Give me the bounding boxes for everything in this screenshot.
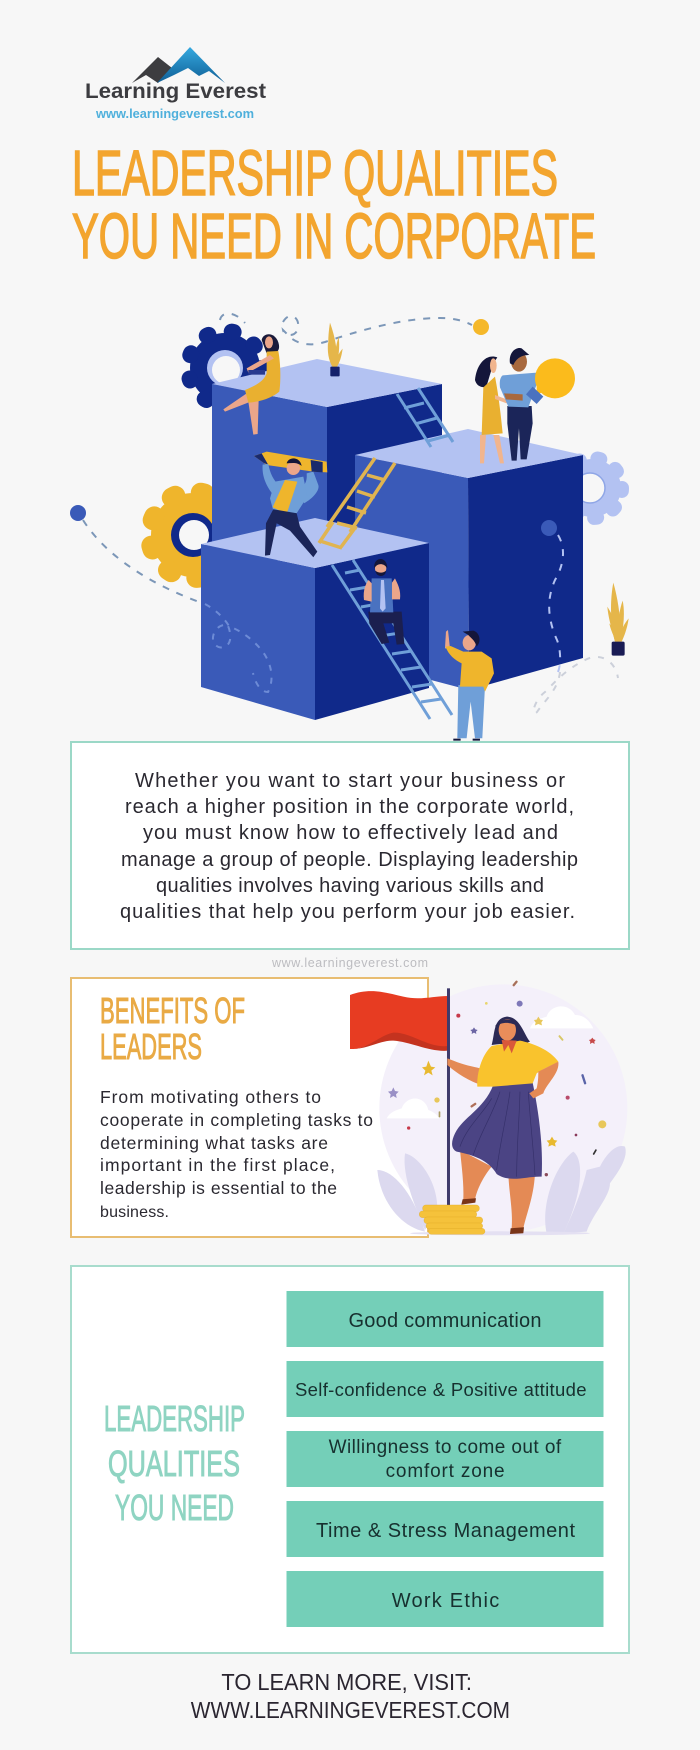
benefits paragraph	[100, 1087, 373, 1221]
woman	[447, 1017, 558, 1234]
leaves	[377, 1146, 626, 1233]
hero illustration: blocks, gears and people	[70, 314, 629, 741]
ladder: front	[332, 560, 452, 719]
icon: yellow dot	[473, 319, 489, 335]
quality: self-confidence	[286, 1361, 604, 1417]
intro paragraph: reach a higher position in the corporate world,	[125, 796, 574, 818]
panel: intro text	[71, 742, 629, 949]
ladder: light blue on block A	[397, 388, 453, 447]
panel: leadership qualities you need	[71, 1266, 629, 1653]
qualities heading: QUALITIES	[108, 1443, 240, 1484]
quality: self-confidence: Self-confidence & Positive attitude	[295, 1379, 586, 1400]
intro paragraph	[120, 770, 578, 923]
icon: plant right	[607, 583, 629, 656]
footer call to action	[191, 1669, 510, 1723]
block C	[201, 518, 429, 720]
flag pole	[447, 988, 450, 1207]
intro paragraph: manage a group of people. Displaying leadership	[121, 849, 578, 871]
quality: work ethic	[286, 1571, 604, 1627]
quality: good communication: Good communication	[348, 1310, 542, 1332]
icon: dark blue gear	[188, 331, 262, 405]
benefits paragraph: From motivating others to	[100, 1087, 321, 1107]
intro paragraph: you must know how to effectively lead and	[143, 822, 558, 844]
block A	[212, 359, 442, 560]
pale background circle	[379, 984, 627, 1232]
person: man holding light bulb	[500, 348, 575, 461]
benefits paragraph: important in the first place,	[100, 1155, 335, 1175]
benefits heading: BENEFITS OF	[100, 990, 245, 1031]
icon: light gear	[562, 458, 622, 518]
intro paragraph: Whether you want to start your business or	[135, 770, 565, 792]
block B	[355, 429, 583, 690]
intro paragraph: qualities that help you perform your job easier.	[120, 901, 575, 923]
confetti and stars	[388, 980, 606, 1176]
footer call to action: TO LEARN MORE, VISIT:	[221, 1669, 472, 1695]
qualities heading: LEADERSHIP	[104, 1398, 245, 1439]
quality: time and stress	[286, 1501, 604, 1557]
red flag	[350, 991, 448, 1051]
intro paragraph: qualities involves having various skills and	[156, 875, 544, 897]
icon: yellow gear	[150, 492, 236, 578]
benefits heading	[100, 990, 245, 1067]
panel: benefits of leaders	[71, 978, 627, 1237]
person: man in yellow shirt looking up	[445, 630, 494, 741]
dashed paths on blocks	[205, 604, 272, 692]
dashed path: right lower	[534, 657, 618, 713]
icon: blue dot right	[541, 520, 557, 536]
benefits heading: LEADERS	[100, 1026, 202, 1067]
quality: work ethic: Work Ethic	[392, 1590, 499, 1612]
icon: blue dot left	[70, 505, 86, 521]
qualities heading: YOU NEED	[115, 1487, 234, 1528]
ground shadow	[410, 1231, 590, 1235]
quality: willingness: comfort zone	[386, 1461, 505, 1482]
ladder: yellow	[319, 458, 395, 548]
person: bearded man on ladder	[364, 559, 404, 645]
title	[72, 137, 596, 272]
logo: Learning Everest	[85, 47, 266, 121]
person: woman with yellow dress	[475, 356, 508, 463]
icon: plant on block	[328, 323, 343, 376]
icon: mountains	[132, 47, 225, 83]
logo url: www.learningeverest.com	[95, 106, 254, 121]
benefits paragraph: cooperate in completing tasks to	[100, 1110, 373, 1130]
watermark url: www.learningeverest.com	[271, 956, 428, 970]
illustration: woman with flag	[350, 980, 627, 1235]
coin stack	[419, 1205, 485, 1234]
benefits paragraph: determining what tasks are	[100, 1133, 328, 1153]
quality: willingness	[286, 1431, 604, 1487]
dashed path: right	[549, 535, 563, 672]
logo wordmark: Learning Everest	[85, 80, 266, 103]
person: man carrying pencil	[254, 452, 327, 557]
qualities heading	[104, 1398, 245, 1528]
benefits paragraph: business.	[100, 1204, 169, 1221]
dashed path: left	[83, 520, 205, 604]
benefits paragraph: leadership is essential to the	[100, 1178, 337, 1198]
person: sitting woman with laptop	[223, 334, 280, 435]
quality: time and stress: Time & Stress Management	[316, 1520, 575, 1542]
quality: willingness: Willingness to come out of	[329, 1437, 562, 1458]
clouds	[387, 1006, 593, 1118]
quality: good communication	[286, 1291, 604, 1347]
footer call to action: WWW.LEARNINGEVEREST.COM	[191, 1697, 510, 1723]
dashed path: top	[220, 314, 472, 344]
